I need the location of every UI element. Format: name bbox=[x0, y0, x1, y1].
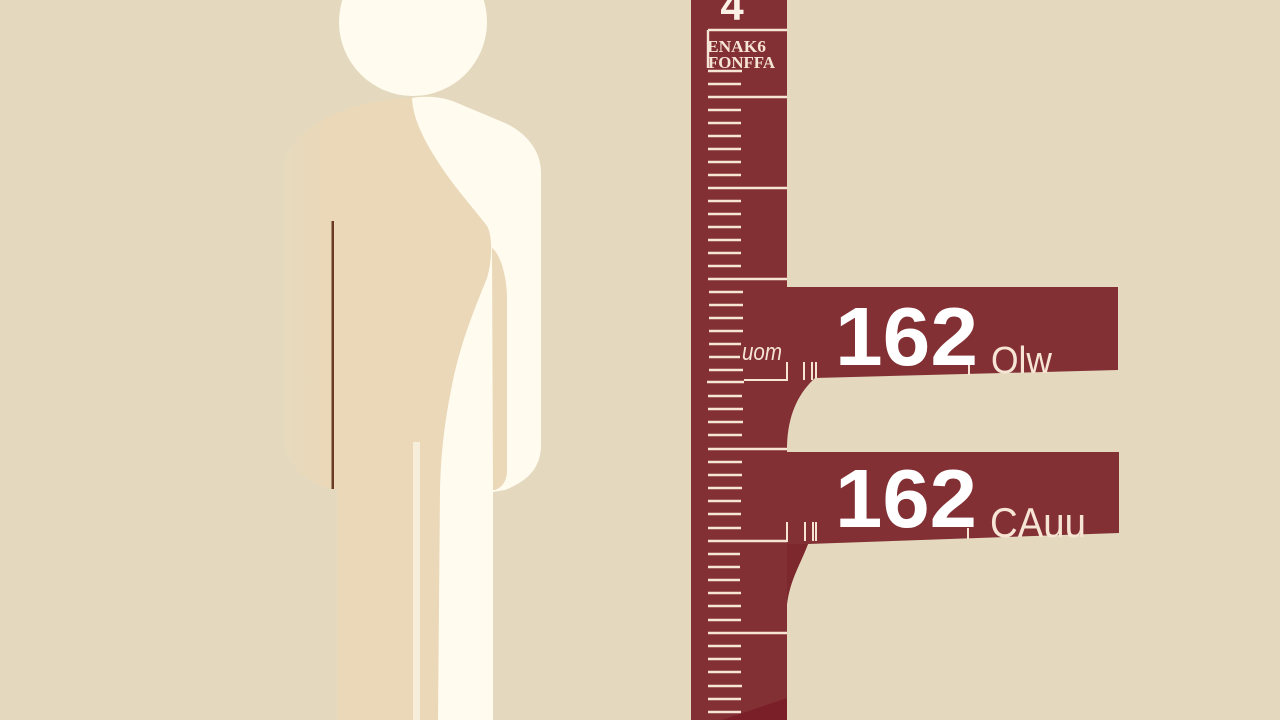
figure: leg gap bbox=[413, 442, 420, 720]
ruler top label: FONFFA bbox=[708, 53, 776, 72]
figure: head bbox=[339, 0, 487, 96]
upper callout bar bbox=[770, 280, 1118, 446]
lower bar small marks bbox=[708, 522, 968, 541]
lower unit: CAuu bbox=[990, 499, 1086, 546]
lower value: 162 bbox=[835, 452, 977, 545]
lower callout bar bbox=[770, 450, 1119, 604]
human figure bbox=[283, 0, 541, 720]
figure: tan inner arm strip bbox=[492, 248, 507, 490]
ruler base shade bbox=[722, 698, 787, 720]
ruler ticks bbox=[707, 30, 787, 712]
upper value: 162 bbox=[835, 290, 978, 383]
figure: light right side bbox=[412, 97, 541, 720]
figure: arm line bbox=[332, 221, 334, 489]
upper bar small marks: uom bbox=[742, 339, 782, 366]
ruler body bbox=[691, 0, 787, 720]
lower bar shadow bbox=[787, 544, 808, 604]
ruler top label: ENAK6 bbox=[707, 37, 766, 56]
upper unit: Olw bbox=[991, 340, 1053, 382]
upper bar small marks bbox=[742, 339, 969, 380]
height ruler bbox=[691, 0, 1119, 720]
figure: tan left side bbox=[283, 98, 491, 720]
ruler top label bbox=[707, 37, 776, 72]
